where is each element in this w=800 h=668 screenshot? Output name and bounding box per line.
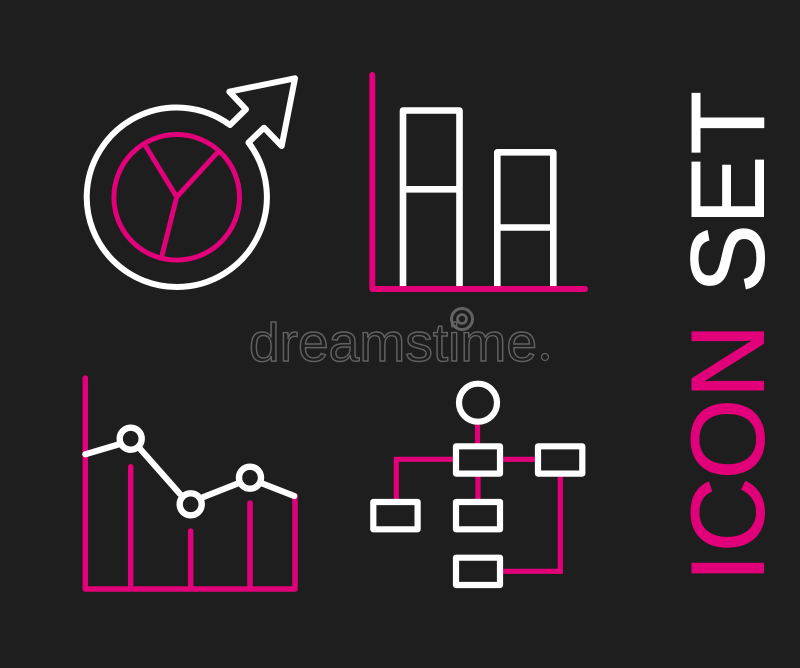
watermark registered mark (542, 354, 548, 360)
icon: stacked bar chart (372, 75, 585, 289)
icon: line chart with data points (85, 378, 295, 589)
pink axes and columns (85, 378, 295, 589)
title word: SET: SET (670, 91, 786, 294)
male symbol outline with arrow (87, 78, 295, 287)
pie chart (114, 134, 240, 260)
watermark wordmark: dreamstime (249, 313, 537, 373)
title: ICON SET (670, 91, 786, 582)
watermark (249, 308, 548, 373)
white bars (403, 110, 553, 286)
pink axes (372, 75, 585, 289)
title word: ICON: ICON (670, 323, 786, 582)
data point circles (120, 428, 261, 515)
white trend line (85, 444, 294, 498)
icon: male symbol with pie chart (87, 78, 295, 287)
white nodes (373, 384, 582, 585)
icon: flowchart (373, 384, 582, 585)
watermark spiral (452, 308, 472, 330)
pink connectors (396, 424, 560, 571)
